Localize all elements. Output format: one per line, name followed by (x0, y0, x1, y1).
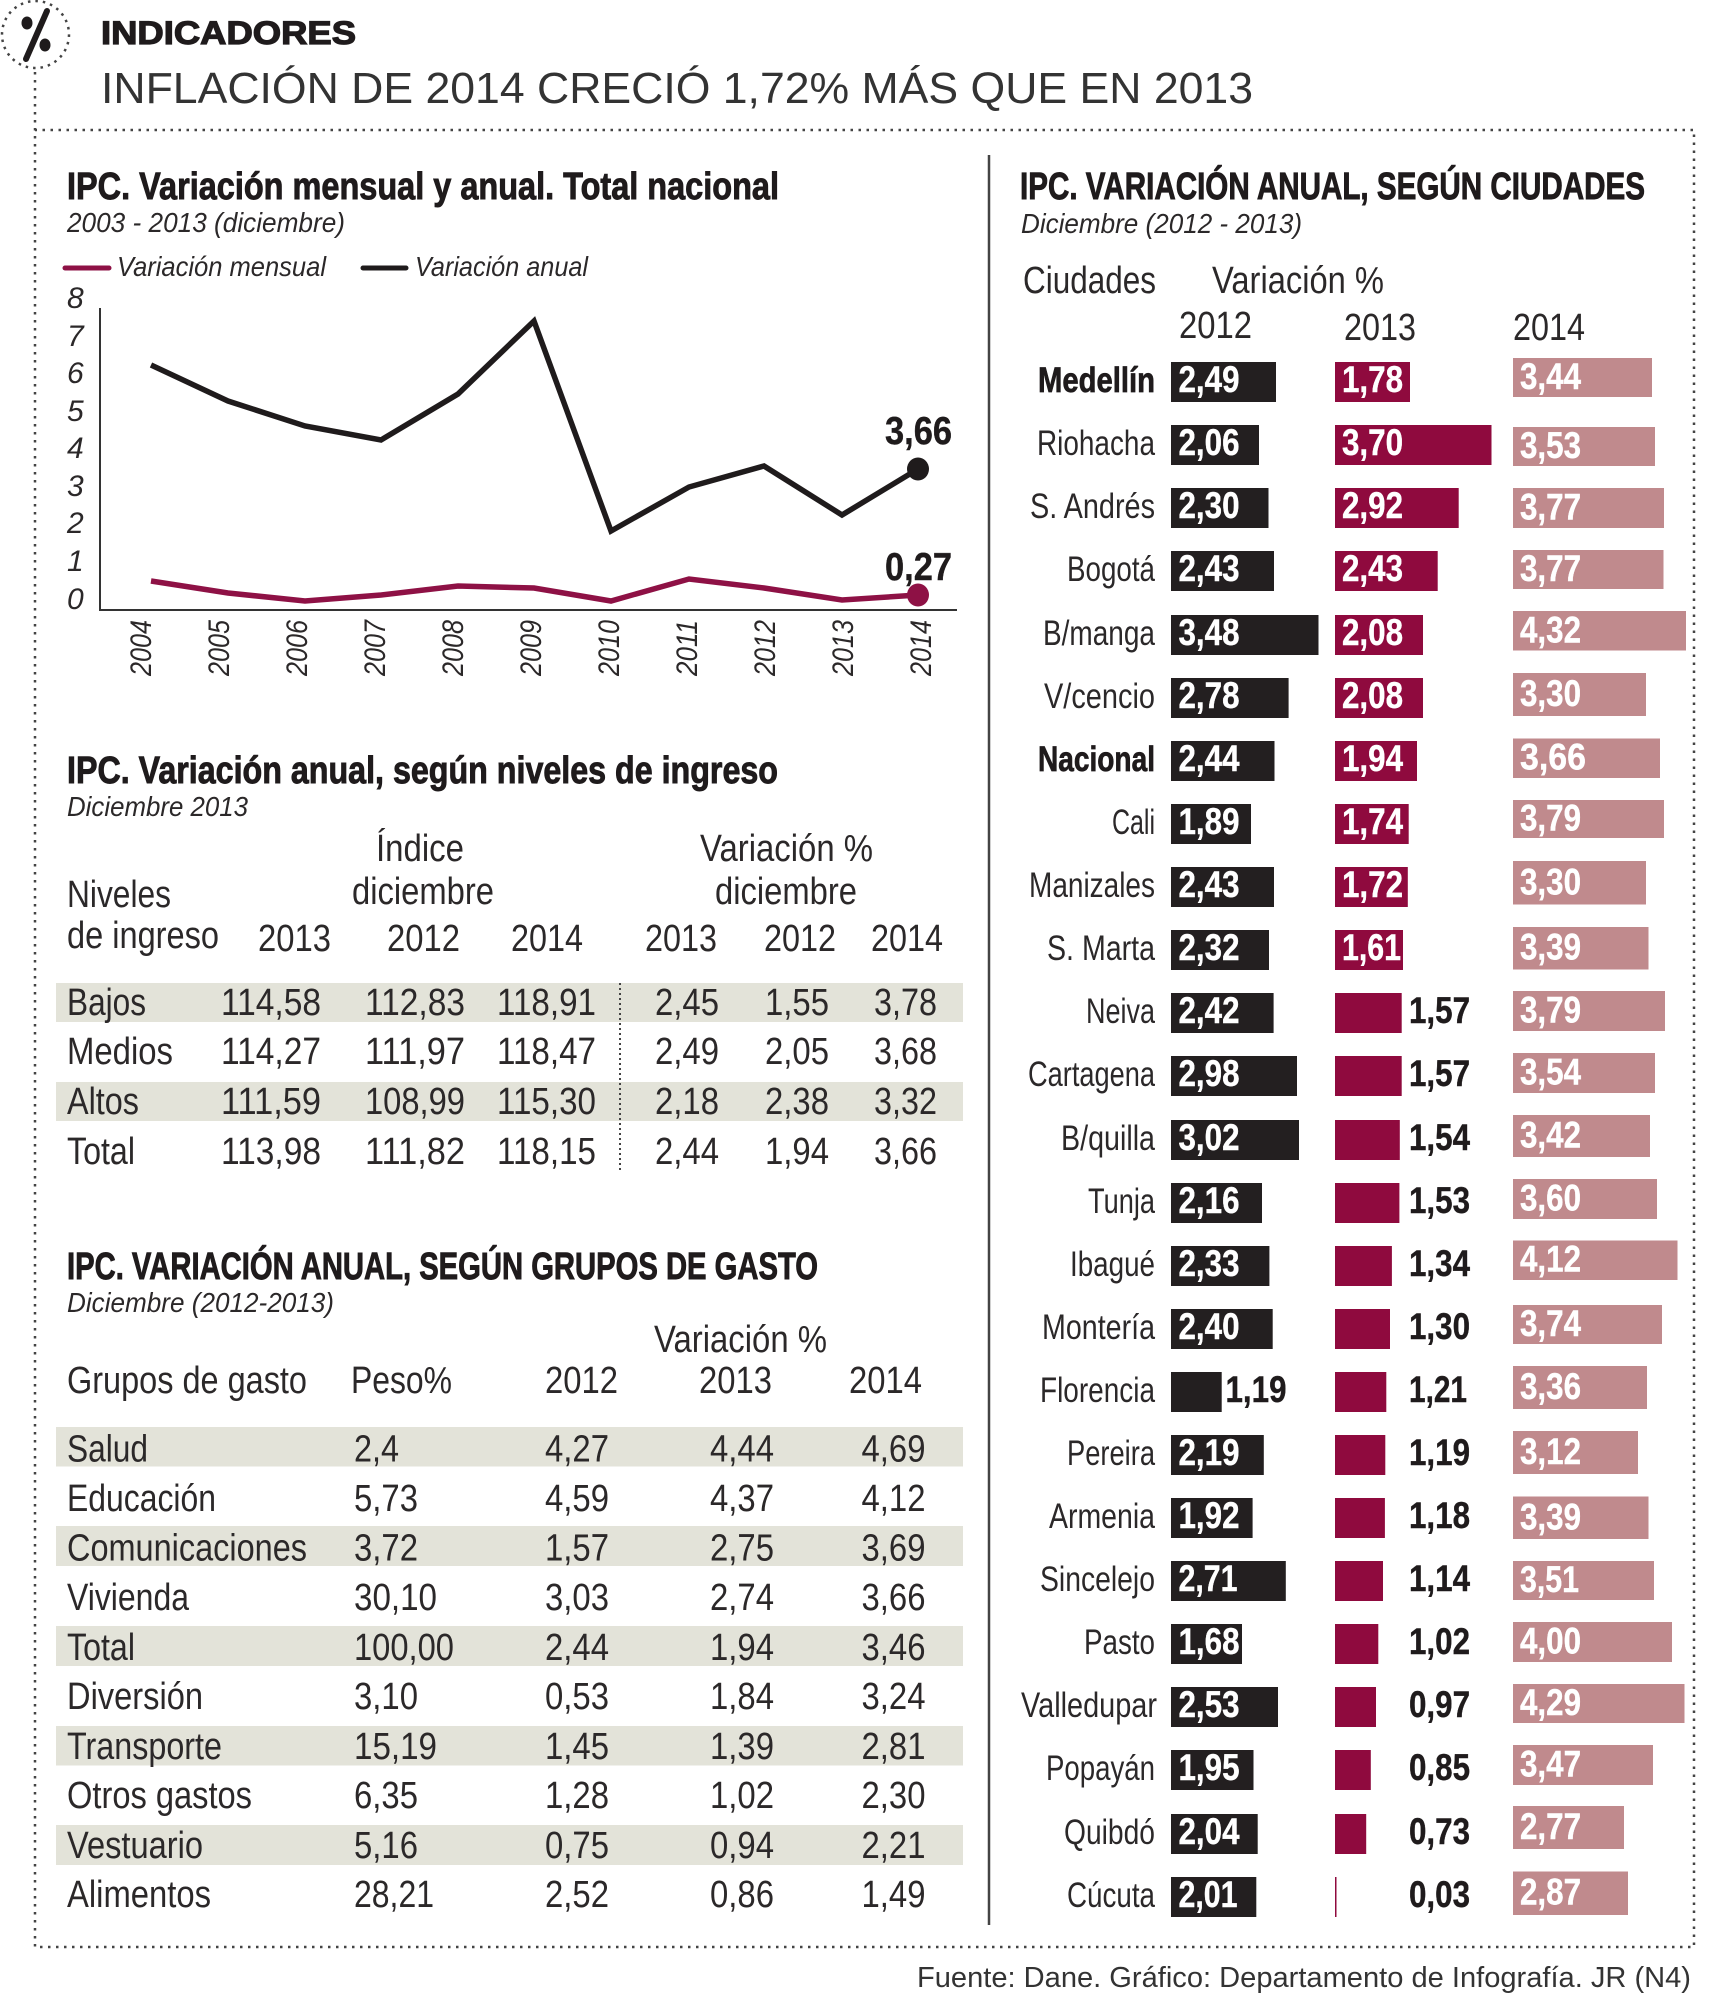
x axis year labels: 2004 (125, 620, 158, 677)
chart header: 2014 (1513, 307, 1585, 349)
row: Diversión: 1,84 (710, 1676, 774, 1718)
table header: 2013 (699, 1360, 772, 1402)
row: Neiva (1086, 990, 1665, 1033)
row: Riohacha: Riohacha (1037, 424, 1155, 463)
row: Comunicaciones: 2,75 (710, 1528, 774, 1570)
row: S. Andrés (1030, 485, 1664, 528)
chart axes (100, 308, 957, 610)
row: Transporte: 1,39 (710, 1726, 774, 1768)
row: Diversión: 0,53 (545, 1676, 609, 1718)
y axis labels: 4 (67, 432, 84, 465)
row: Altos: 115,30 (497, 1081, 596, 1123)
chart header: Variación % (1212, 260, 1384, 302)
row: B/quilla: 3,42 (1520, 1114, 1581, 1156)
y axis labels (66, 282, 85, 616)
row: Medios (67, 1031, 937, 1073)
row: Manizales: 3,30 (1520, 862, 1581, 902)
marker: monthly endpoint (907, 584, 929, 606)
row: Sincelejo: Sincelejo (1040, 1560, 1155, 1599)
row: Vestuario (67, 1825, 926, 1867)
row: Altos: 3,32 (874, 1081, 937, 1123)
row: Neiva: 1,57 (1409, 990, 1470, 1031)
value label: monthly: 0,27 (885, 546, 952, 589)
panel: income levels table (56, 750, 963, 1173)
row: Altos: 108,99 (365, 1081, 465, 1123)
row: Diversión: 3,24 (862, 1676, 926, 1718)
heading: IPC. VARIACIÓN ANUAL, SEGÚN GRUPOS DE GASTO (67, 1244, 818, 1288)
row: Manizales (1029, 861, 1646, 907)
row: Popayán: Popayán (1046, 1749, 1155, 1788)
row: Otros gastos: 2,30 (862, 1775, 926, 1817)
table header: Peso% (351, 1360, 452, 1402)
chart header: 2013 (1344, 307, 1416, 349)
row: Manizales: 1,72 (1342, 864, 1403, 905)
row: Cúcuta: Cúcuta (1067, 1876, 1155, 1915)
subheading: 2003 - 2013 (diciembre) (66, 207, 345, 238)
table header: diciembre (352, 871, 494, 913)
row: Total: 1,94 (710, 1627, 774, 1669)
row: Pereira (1067, 1431, 1638, 1475)
table header: 2012 (764, 918, 836, 960)
row: Tunja: 2,16 (1178, 1180, 1240, 1221)
row: Medios: Medios (67, 1031, 173, 1073)
subheading: Diciembre 2013 (67, 791, 248, 822)
row: Medellín: 3,44 (1520, 356, 1581, 397)
row: Sincelejo (1040, 1558, 1654, 1601)
chart header: 2012 (1179, 305, 1252, 347)
row: Bajos: 112,83 (365, 982, 465, 1024)
table header: 2013 (645, 918, 717, 960)
row: B/quilla: 3,02 (1178, 1117, 1240, 1158)
table header: 2013 (258, 918, 331, 960)
row: Salud: Salud (67, 1428, 148, 1470)
x axis year labels: 2009 (515, 620, 548, 677)
row: Vivienda: 30,10 (354, 1577, 437, 1619)
row: Comunicaciones: 1,57 (545, 1528, 609, 1570)
row: Comunicaciones: 3,72 (354, 1528, 418, 1570)
value label: annual: 3,66 (885, 410, 952, 453)
row: Riohacha (1037, 422, 1655, 466)
table header (67, 827, 943, 960)
row: Vestuario: 0,94 (710, 1825, 774, 1867)
row: Ibagué: 1,34 (1409, 1243, 1470, 1284)
row: Total: 1,94 (765, 1131, 829, 1173)
row: Bajos: 114,58 (221, 982, 321, 1024)
row: B/manga: 2,08 (1342, 612, 1403, 653)
row: S. Marta: S. Marta (1047, 929, 1155, 968)
row: Tunja (1088, 1178, 1657, 1223)
line: variación anual (151, 321, 918, 531)
chart header (1023, 260, 1585, 349)
row: Tunja: 1,53 (1409, 1180, 1470, 1221)
table header: Niveles (67, 874, 171, 916)
row: Cali: 3,79 (1520, 798, 1581, 838)
row: Valledupar: 4,29 (1520, 1682, 1581, 1723)
table header: Variación % (654, 1319, 827, 1361)
row: Montería: Montería (1042, 1308, 1155, 1347)
row: Bajos: 3,78 (874, 982, 937, 1024)
row: B/quilla (1061, 1114, 1650, 1160)
chart header: Ciudades (1023, 260, 1156, 302)
row: Nacional: 1,94 (1342, 738, 1403, 779)
row: Educación: 5,73 (354, 1478, 418, 1520)
heading: IPC. Variación anual, según niveles de ingreso (67, 750, 778, 792)
row: Sincelejo: 3,51 (1520, 1559, 1579, 1600)
row: Otros gastos: 1,28 (545, 1775, 609, 1817)
row: Vivienda (67, 1577, 926, 1619)
row: Popayán: 3,47 (1520, 1744, 1581, 1784)
row: Popayán: 0,85 (1409, 1747, 1470, 1788)
y axis labels: 8 (67, 282, 84, 315)
y axis labels: 7 (67, 320, 85, 353)
row: Bogotá: Bogotá (1067, 550, 1155, 589)
row: B/quilla: 1,54 (1409, 1117, 1470, 1158)
row: V/cencio: 2,78 (1178, 675, 1240, 716)
row: B/manga: B/manga (1043, 614, 1155, 653)
row: Sincelejo: 1,14 (1409, 1558, 1470, 1599)
row: Cali: 1,74 (1342, 801, 1403, 842)
row: S. Andrés: 2,30 (1178, 485, 1240, 526)
row: Armenia (1049, 1495, 1648, 1539)
row: Quibdó: 2,77 (1520, 1806, 1581, 1847)
row: Tunja: 3,60 (1520, 1178, 1581, 1218)
row: Valledupar: 2,53 (1178, 1684, 1240, 1725)
table header: de ingreso (67, 915, 219, 957)
row: Cartagena (1028, 1052, 1655, 1096)
row: Cartagena: Cartagena (1028, 1055, 1155, 1094)
row: Armenia: 1,18 (1409, 1495, 1470, 1536)
row: Nacional (1038, 736, 1660, 781)
row: Pereira: Pereira (1067, 1434, 1155, 1473)
icon: percent badge (2, 1, 69, 68)
row: Transporte: 15,19 (354, 1726, 437, 1768)
row: Alimentos (67, 1874, 926, 1916)
row: Altos: Altos (67, 1081, 139, 1123)
x axis year labels: 2011 (671, 620, 704, 677)
table header: Grupos de gasto (67, 1360, 307, 1402)
row: Valledupar (1021, 1682, 1684, 1727)
row: V/cencio: 2,08 (1342, 675, 1403, 716)
row: Medellín (1038, 356, 1652, 402)
row: S. Marta: 3,39 (1520, 926, 1581, 968)
row: Montería: 2,40 (1178, 1306, 1240, 1347)
row: Popayán (1046, 1744, 1653, 1790)
row: Total (67, 1627, 926, 1669)
row: Manizales: Manizales (1029, 866, 1155, 905)
row: S. Andrés: S. Andrés (1030, 487, 1155, 526)
row: Vestuario: 2,21 (862, 1825, 926, 1867)
row: Sincelejo: 2,71 (1178, 1558, 1238, 1599)
row: Medios: 118,47 (497, 1031, 596, 1073)
row: Medellín: 2,49 (1178, 359, 1240, 400)
table header: diciembre (715, 871, 857, 913)
row: Salud: 2,4 (354, 1428, 399, 1470)
row: Total: 100,00 (354, 1627, 454, 1669)
row: Total: 118,15 (497, 1131, 596, 1173)
row: Medellín: 1,78 (1342, 359, 1403, 400)
y axis labels: 6 (67, 357, 84, 390)
row: Educación: 4,12 (862, 1478, 926, 1520)
row: Cartagena: 3,54 (1520, 1052, 1581, 1092)
subheading: Diciembre (2012 - 2013) (1021, 208, 1302, 239)
row: Ibagué (1070, 1238, 1678, 1286)
row: Otros gastos (67, 1775, 926, 1817)
row: Medios: 114,27 (221, 1031, 321, 1073)
row: Salud: 4,69 (862, 1428, 926, 1470)
row: Cúcuta: 0,03 (1409, 1874, 1470, 1915)
row: Tunja: Tunja (1088, 1182, 1155, 1221)
x axis year labels (125, 619, 938, 677)
row: Cartagena: 1,57 (1409, 1053, 1470, 1094)
row: Bajos: 1,55 (765, 982, 829, 1024)
line: variación mensual (151, 579, 918, 601)
row: Educación: 4,37 (710, 1478, 774, 1520)
row: Pereira: 2,19 (1178, 1432, 1240, 1473)
heading: IPC. Variación mensual y anual. Total nacional (67, 166, 779, 208)
row: Vestuario: Vestuario (67, 1825, 203, 1867)
row: Alimentos: 2,52 (545, 1874, 609, 1916)
row: V/cencio (1044, 673, 1646, 718)
x axis year labels: 2006 (281, 620, 314, 677)
panel: spending groups table (56, 1244, 963, 1916)
row: Pasto: 1,02 (1409, 1621, 1470, 1662)
row: Bajos (67, 982, 937, 1024)
row: Neiva: 3,79 (1520, 990, 1581, 1030)
row: Neiva: 2,42 (1178, 990, 1240, 1031)
row: Ibagué: 2,33 (1178, 1243, 1240, 1284)
row: Vivienda: 2,74 (710, 1577, 774, 1619)
x axis year labels: 2007 (359, 619, 392, 677)
row: Comunicaciones: 3,69 (862, 1528, 926, 1570)
table header: Variación % (700, 828, 873, 870)
row: Medios: 2,49 (655, 1031, 719, 1073)
title: INFLACIÓN DE 2014 CRECIÓ 1,72% MÁS QUE EN 2013 (101, 64, 1253, 113)
x axis year labels: 2010 (593, 620, 626, 677)
row: Valledupar: Valledupar (1021, 1686, 1157, 1725)
row: Total: Total (67, 1131, 135, 1173)
row: Alimentos: 1,49 (862, 1874, 926, 1916)
row: Alimentos: 28,21 (354, 1874, 434, 1916)
row: Florencia: Florencia (1040, 1371, 1155, 1410)
row: Montería: 1,30 (1409, 1306, 1470, 1347)
row: Pereira: 1,19 (1409, 1432, 1470, 1473)
row: Nacional: 2,44 (1178, 738, 1240, 779)
row: Florencia: 3,36 (1520, 1366, 1581, 1407)
row: Nacional: 3,66 (1520, 736, 1586, 778)
x axis year labels: 2013 (827, 620, 860, 677)
row: Quibdó: 2,04 (1178, 1811, 1240, 1852)
row: Cúcuta: 2,87 (1520, 1872, 1581, 1912)
row: Educación (67, 1478, 926, 1520)
row: Montería: 3,74 (1520, 1303, 1581, 1344)
row: V/cencio: V/cencio (1044, 677, 1155, 716)
row: Comunicaciones (67, 1528, 926, 1570)
row: B/manga: 4,32 (1520, 610, 1581, 650)
row: S. Andrés: 3,77 (1520, 486, 1581, 528)
row: B/manga (1043, 610, 1686, 655)
row: Alimentos: Alimentos (67, 1874, 211, 1916)
row: Nacional: Nacional (1038, 740, 1155, 779)
subheading: Diciembre (2012-2013) (67, 1287, 334, 1318)
row: Salud (67, 1428, 926, 1470)
y axis labels: 5 (67, 395, 84, 428)
row: Quibdó (1064, 1806, 1624, 1854)
section label: INDICADORES (101, 15, 356, 51)
row: Total: Total (67, 1627, 135, 1669)
row: Diversión: 3,10 (354, 1676, 418, 1718)
row: Total (67, 1131, 937, 1173)
row: Quibdó: 0,73 (1409, 1811, 1470, 1852)
row: Total: 3,66 (874, 1131, 937, 1173)
row: Bajos: 118,91 (497, 982, 596, 1024)
x axis year labels: 2014 (905, 620, 938, 677)
row: Medios: 3,68 (874, 1031, 937, 1073)
row: Transporte (67, 1726, 926, 1768)
row: Altos: 111,59 (221, 1081, 321, 1123)
row: Cúcuta (1067, 1872, 1628, 1917)
row: Ibagué: 4,12 (1520, 1238, 1581, 1280)
row: Medios: 2,05 (765, 1031, 829, 1073)
row: Educación: 4,59 (545, 1478, 609, 1520)
x axis year labels: 2008 (437, 620, 470, 677)
row: Vivienda: 3,66 (862, 1577, 926, 1619)
row: Florencia: 1,21 (1409, 1369, 1467, 1410)
row: Total: 3,46 (862, 1627, 926, 1669)
row: Vestuario: 0,75 (545, 1825, 609, 1867)
row: Transporte: 1,45 (545, 1726, 609, 1768)
table header: 2014 (871, 918, 943, 960)
row: Manizales: 2,43 (1178, 864, 1240, 905)
row: Riohacha: 3,70 (1342, 422, 1403, 463)
row: Altos (67, 1081, 937, 1123)
row: Vivienda: Vivienda (67, 1577, 190, 1619)
x axis year labels: 2012 (749, 620, 782, 677)
legend (65, 251, 589, 282)
row: Comunicaciones: Comunicaciones (67, 1528, 307, 1570)
row: B/manga: 3,48 (1178, 612, 1240, 653)
source footer: Fuente: Dane. Gráfico: Departamento de Infografía. JR (N4) (917, 1962, 1691, 1994)
row: Cúcuta: 2,01 (1178, 1874, 1238, 1915)
row: Total: 111,82 (365, 1131, 465, 1173)
row: Vivienda: 3,03 (545, 1577, 609, 1619)
y axis labels: 1 (67, 545, 84, 578)
row: Medios: 111,97 (365, 1031, 465, 1073)
row: Bajos: 2,45 (655, 982, 719, 1024)
row: S. Andrés: 2,92 (1342, 485, 1403, 526)
row: Popayán: 1,95 (1178, 1747, 1240, 1788)
table header (67, 1319, 922, 1402)
row: Bogotá: 2,43 (1342, 548, 1403, 589)
row: Ibagué: Ibagué (1070, 1245, 1155, 1284)
row: Florencia (1040, 1366, 1647, 1412)
table header: Índice (376, 827, 464, 870)
table header: 2014 (511, 918, 583, 960)
row: Montería (1042, 1303, 1662, 1349)
row: Riohacha: 3,53 (1520, 425, 1581, 466)
row: Pasto (1084, 1620, 1672, 1664)
row: Cartagena: 2,98 (1178, 1053, 1240, 1094)
row: Transporte: 2,81 (862, 1726, 926, 1768)
row: Valledupar: 0,97 (1409, 1684, 1470, 1725)
row: Neiva: Neiva (1086, 992, 1155, 1031)
marker: annual endpoint (907, 458, 929, 480)
row: Bajos: Bajos (67, 982, 146, 1024)
row: Quibdó: Quibdó (1064, 1813, 1155, 1852)
row: Diversión: Diversión (67, 1676, 203, 1718)
panel: monthly and annual variation line chart (65, 166, 957, 677)
row: S. Marta: 1,61 (1342, 927, 1401, 968)
row: Pasto: 1,68 (1178, 1621, 1240, 1662)
row: Salud: 4,44 (710, 1428, 774, 1470)
row: Pasto: Pasto (1084, 1623, 1155, 1662)
row: Vestuario: 5,16 (354, 1825, 418, 1867)
row: Educación: Educación (67, 1478, 216, 1520)
row: Cali: Cali (1112, 803, 1155, 842)
row: V/cencio: 3,30 (1520, 673, 1581, 714)
row: Total: 113,98 (221, 1131, 321, 1173)
table header: 2014 (849, 1360, 922, 1402)
row: Total: 2,44 (545, 1627, 609, 1669)
row: Bogotá (1067, 548, 1664, 591)
y axis labels: 3 (67, 470, 84, 503)
row: Armenia: 3,39 (1520, 1496, 1581, 1538)
row: S. Marta: 2,32 (1178, 927, 1240, 968)
row: Florencia: 1,19 (1226, 1369, 1286, 1410)
legend: Variación mensual (117, 251, 327, 282)
row: Cali (1112, 798, 1664, 844)
row: Armenia: Armenia (1049, 1497, 1155, 1536)
row: Alimentos: 0,86 (710, 1874, 774, 1916)
row: Transporte: Transporte (67, 1726, 222, 1768)
row: Otros gastos: 1,02 (710, 1775, 774, 1817)
table header: 2012 (545, 1360, 618, 1402)
row: B/quilla: B/quilla (1061, 1119, 1155, 1158)
row: Armenia: 1,92 (1178, 1495, 1240, 1536)
row: Altos: 2,18 (655, 1081, 719, 1123)
row: Medellín: Medellín (1038, 361, 1155, 400)
row: Diversión (67, 1676, 926, 1718)
row: Bogotá: 3,77 (1520, 548, 1581, 589)
row: S. Marta (1047, 926, 1648, 970)
row: Cali: 1,89 (1178, 801, 1240, 842)
row: Otros gastos: 6,35 (354, 1775, 418, 1817)
y axis labels: 0 (67, 583, 84, 616)
table header: 2012 (387, 918, 460, 960)
row: Pereira: 3,12 (1520, 1431, 1581, 1472)
panel: cities bar chart (1020, 164, 1686, 1917)
row: Total: 2,44 (655, 1131, 719, 1173)
row: Altos: 2,38 (765, 1081, 829, 1123)
row: Otros gastos: Otros gastos (67, 1775, 252, 1817)
row: Riohacha: 2,06 (1178, 422, 1240, 463)
row: Pasto: 4,00 (1520, 1620, 1581, 1662)
x axis year labels: 2005 (203, 620, 236, 677)
row: Bogotá: 2,43 (1178, 548, 1240, 589)
y axis labels: 2 (66, 507, 84, 540)
row: Salud: 4,27 (545, 1428, 609, 1470)
legend: Variación anual (415, 251, 589, 282)
